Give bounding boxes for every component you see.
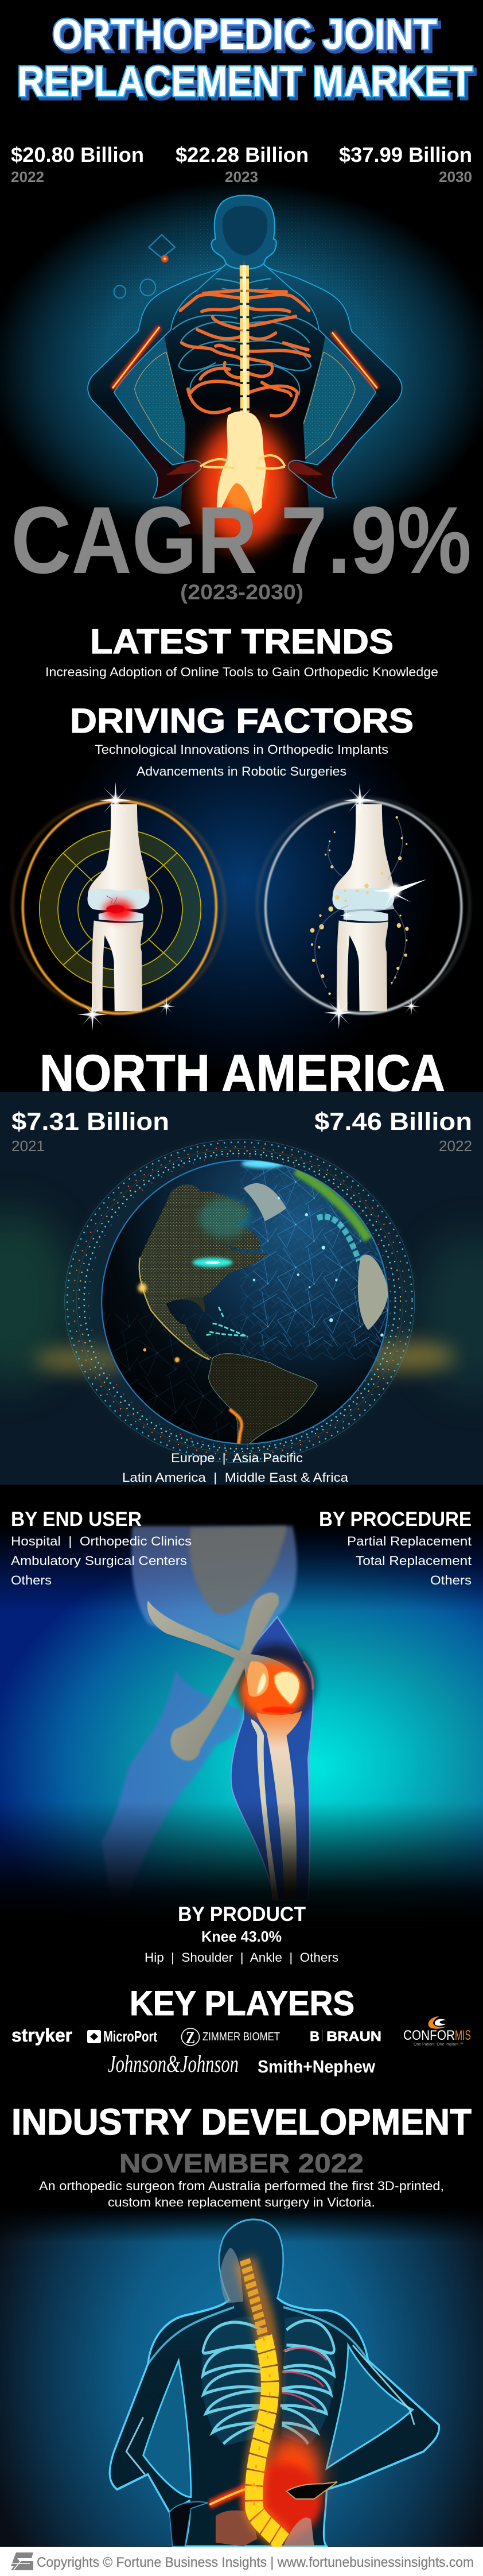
blue ribs xyxy=(173,278,317,396)
north america xyxy=(139,1184,268,1359)
text: driving factors: Technological Innovations in Orthopedic Implants xyxy=(95,742,388,757)
panel: by end user: Others xyxy=(11,1573,52,1587)
arm cutouts xyxy=(326,2345,413,2469)
title: ORTHOPEDIC JOINT xyxy=(55,13,440,61)
title xyxy=(17,10,476,108)
logo: johnson and johnson: Johnson&Johnson xyxy=(108,2051,239,2078)
spine xyxy=(245,2260,283,2543)
text: industry development: custom knee replacement surgery in Victoria. xyxy=(108,2195,375,2209)
panel: by end user: BY END USER xyxy=(11,1508,142,1531)
panel: by procedure: Others xyxy=(430,1573,472,1587)
stat: 2022: 2022 xyxy=(11,168,44,185)
diamond and circles xyxy=(149,235,175,258)
text: driving factors: Advancements in Robotic Surgeries xyxy=(137,764,346,778)
stat: 2023 xyxy=(176,143,309,185)
head xyxy=(212,195,276,269)
panel: by procedure: Total Replacement xyxy=(356,1554,472,1568)
logo: stryker: stryker xyxy=(11,2025,72,2046)
title: ORTHOPEDIC JOINT xyxy=(52,10,437,58)
stat: 2030: 2030 xyxy=(439,168,472,185)
caribbean xyxy=(207,1307,248,1337)
back leg xyxy=(102,1669,241,1900)
panel: by procedure: Partial Replacement xyxy=(347,1534,472,1548)
neon bars xyxy=(112,327,377,388)
stat: 2030: $37.99 Billion xyxy=(339,143,472,166)
heading: north america: NORTH AMERICA xyxy=(40,1045,445,1102)
pelvis xyxy=(217,411,266,514)
text: industry development: An orthopedic surgeon from Australia performed the first 3D-printed, xyxy=(39,2179,444,2193)
hip xyxy=(131,1526,313,1693)
panel: by product: Hip | Shoulder | Ankle | Others xyxy=(145,1950,338,1965)
heading: industry development: INDUSTRY DEVELOPMENT xyxy=(11,2101,472,2143)
panel: by procedure: BY PROCEDURE xyxy=(319,1508,472,1531)
gap left xyxy=(135,352,189,462)
text: latest trends: Increasing Adoption of Online Tools to Gain Orthopedic Knowledge xyxy=(45,665,438,679)
halo xyxy=(65,1140,415,1463)
illustration: glowing back and spine xyxy=(0,165,483,563)
logo: conformis xyxy=(403,2016,471,2047)
text: driving factors xyxy=(95,742,388,778)
spine xyxy=(243,265,244,425)
ribcage xyxy=(201,2317,335,2446)
damaged knee xyxy=(12,782,225,1031)
illustration: night-lit globe xyxy=(0,1092,483,1485)
stat: 2023: 2023 xyxy=(225,168,258,185)
stat: 2021 xyxy=(11,1108,169,1155)
logo: conformis: CONFOR xyxy=(403,2028,455,2043)
heading: driving factors: DRIVING FACTORS xyxy=(70,702,414,740)
logo: conformis: MIS xyxy=(455,2028,471,2043)
stat: 2022: $7.46 Billion xyxy=(314,1108,472,1136)
date: november 2022: NOVEMBER 2022 xyxy=(119,2148,364,2178)
panel: by product: BY PRODUCT xyxy=(178,1903,306,1926)
footer copyright text: Copyrights © Fortune Business Insights | www.fortunebusinessinsights.com xyxy=(37,2555,474,2570)
greenland xyxy=(243,1183,286,1221)
stat: 2021: $7.31 Billion xyxy=(11,1108,169,1136)
front leg xyxy=(231,1617,313,1900)
africa edge xyxy=(358,1254,389,1330)
icon: fortune business insights logo xyxy=(11,2552,33,2570)
panel: by end user: Hospital | Orthopedic Clinics xyxy=(11,1534,192,1548)
lower glow xyxy=(197,422,290,547)
text: other regions: Latin America | Middle East & Africa xyxy=(122,1470,349,1485)
stat: 2022 xyxy=(11,143,144,185)
text: industry development xyxy=(39,2179,444,2209)
panel: by product xyxy=(145,1903,338,1965)
silhouette xyxy=(110,2219,439,2546)
illustration: damaged and healthy knee joints xyxy=(12,782,470,1031)
CAGR period: (2023-2030) xyxy=(180,580,303,604)
heading: latest trends: LATEST TRENDS xyxy=(90,622,394,661)
panel: by end user xyxy=(11,1508,192,1587)
logo: zimmer biomet xyxy=(181,2028,280,2047)
logos: key players xyxy=(11,2016,471,2078)
illustration: x-ray back with spine xyxy=(0,2209,483,2546)
orange ribs xyxy=(180,290,310,416)
sphere xyxy=(102,1160,388,1444)
text: other regions xyxy=(122,1451,349,1485)
logo: conformis: One Patient. One Implant.™ xyxy=(414,2042,463,2047)
red glow xyxy=(263,2434,322,2507)
panel: by procedure xyxy=(319,1508,472,1587)
torso xyxy=(163,261,327,534)
skull xyxy=(220,2248,243,2303)
logo: zimmer biomet: Z xyxy=(186,2028,195,2047)
text: other regions: Europe | Asia Pacific xyxy=(171,1451,303,1465)
blue glow behind joints xyxy=(0,687,483,1078)
pelvis and hand xyxy=(216,2511,257,2546)
footer bar xyxy=(0,2547,483,2576)
stat: 2022: $20.80 Billion xyxy=(11,143,144,166)
logo: b braun xyxy=(310,2029,381,2044)
logo: smith and nephew: Smith+Nephew xyxy=(258,2056,376,2077)
stat: 2021: 2021 xyxy=(11,1137,45,1155)
panel: by end user: Ambulatory Surgical Centers xyxy=(11,1554,187,1568)
stat: 2022 xyxy=(314,1108,472,1155)
south america xyxy=(208,1353,318,1444)
stat: 2022: 2022 xyxy=(439,1137,472,1155)
arms xyxy=(88,264,227,498)
logo: b braun: BRAUN xyxy=(326,2029,381,2044)
stat: 2023: $22.28 Billion xyxy=(176,143,309,166)
logo: zimmer biomet: ZIMMER BIOMET xyxy=(202,2031,280,2043)
healthy knee xyxy=(257,782,470,1029)
heading: key players: KEY PLAYERS xyxy=(130,1984,355,2023)
stat: 2030 xyxy=(339,143,472,185)
panel: by product: Knee 43.0% xyxy=(201,1928,282,1945)
logo: microport xyxy=(87,2028,157,2045)
logo: b braun: B xyxy=(310,2029,320,2044)
illustration: running leg with glowing knee xyxy=(0,1525,483,1921)
logo: microport: MicroPort xyxy=(103,2028,157,2045)
bones xyxy=(170,1593,279,1761)
